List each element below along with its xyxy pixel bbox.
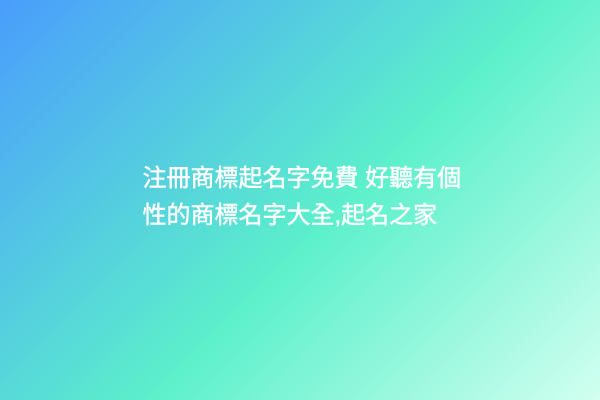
title (142, 165, 461, 229)
title: 注冊商標起名字免費 好聽有個 (142, 165, 461, 192)
title: 性的商標名字大全,起名之家 (142, 202, 437, 229)
